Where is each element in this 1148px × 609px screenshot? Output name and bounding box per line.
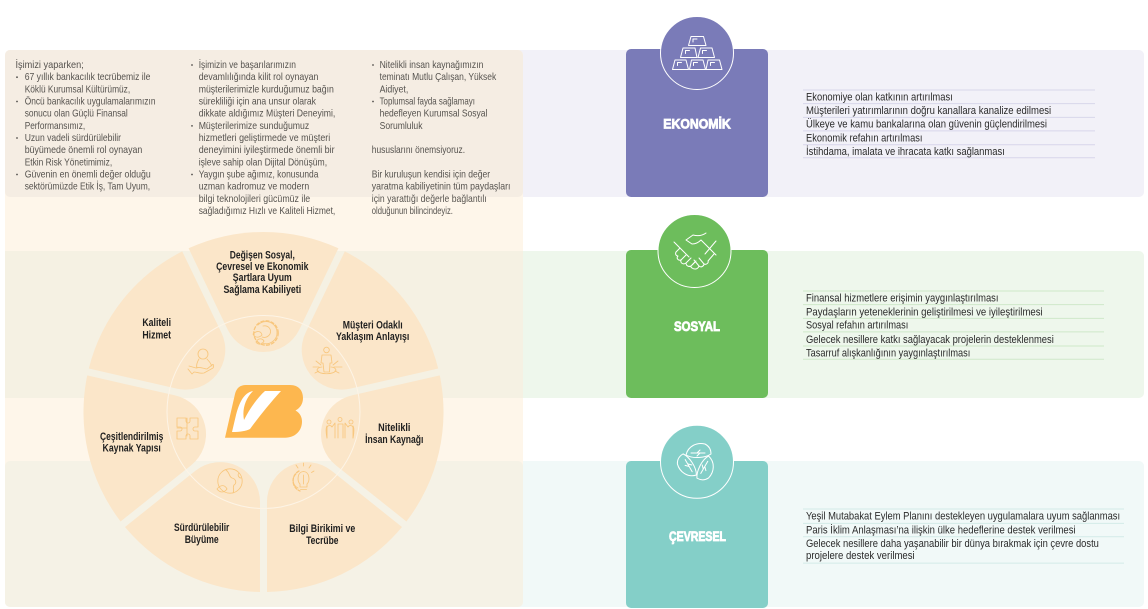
text column 3: yaratma kabiliyetinin tüm paydaşları bbox=[372, 182, 510, 193]
label: Değişen Sosyal: Şartlara Uyum bbox=[233, 272, 292, 284]
label: Nitelikli bbox=[365, 422, 423, 446]
icon: person with arrows bbox=[313, 347, 342, 374]
label: Sürdürülebilir bbox=[174, 522, 230, 546]
badge: sosyal bbox=[658, 214, 731, 288]
label: Sürdürülebilir: Büyüme bbox=[185, 534, 219, 546]
label: Müşteri Odaklı: Yaklaşım Anlayışı bbox=[336, 331, 409, 343]
text column 2: hizmetleri geliştirmede ve müşteri bbox=[199, 133, 330, 144]
panel: sosyal bbox=[626, 214, 1104, 398]
text column 1: İşimizi yaparken; bbox=[16, 58, 84, 71]
text column 2: sağladığımız Hızlı ve Kaliteli Hizmet, bbox=[199, 206, 335, 217]
label: Nitelikli: Nitelikli bbox=[378, 422, 410, 434]
heading: sosyal: SOSYAL bbox=[674, 319, 720, 334]
text column 3: Aidiyet, bbox=[380, 84, 408, 95]
text column 3: Sorumluluk bbox=[380, 121, 423, 132]
icon: gold bars bbox=[672, 36, 722, 70]
label: Çeşitlendirilmiş bbox=[100, 431, 163, 454]
label: Bilgi Birikimi: Tecrübe bbox=[306, 535, 338, 547]
icon: puzzle bbox=[177, 418, 198, 439]
list: cevresel: Paris İklim Anlaşması’na ilişkin ülke hedeflerine destek verilmesi bbox=[806, 524, 1076, 537]
wheel segments bbox=[71, 232, 456, 607]
text column 2: Yaygın şube ağımız, konusunda bbox=[199, 170, 319, 180]
list: sosyal: Paydaşların yeteneklerinin geliştirilmesi ve iyileştirilmesi bbox=[806, 306, 1043, 318]
list: ekonomik: İstihdama, imalata ve ihracata katkı sağlanması bbox=[806, 145, 1005, 158]
text column 2: devamlılığında kilit rol oynayan bbox=[199, 72, 319, 83]
label: Çeşitlendirilmiş: Kaynak Yapısı bbox=[103, 442, 161, 454]
text column 1: Güvenin en önemli değer olduğu bbox=[25, 170, 151, 180]
list: ekonomik: Ülkeye ve kamu bankalarına olan güvenin güçlendirilmesi bbox=[806, 118, 1047, 130]
text column 3: Nitelikli insan kaynağımızın bbox=[380, 60, 484, 71]
panel: cevresel bbox=[626, 425, 1124, 608]
icon: handshake bbox=[674, 233, 716, 269]
list: sosyal: Finansal hizmetlere erişimin yaygınlaştırılması bbox=[806, 292, 998, 304]
text column 3: hedefleyen Kurumsal Sosyal bbox=[380, 109, 487, 120]
icon: hand holding person bbox=[188, 349, 214, 374]
text column 1: sektörümüzde Etik İş, Tam Uyum, bbox=[25, 180, 150, 193]
list: sosyal: Sosyal refahın artırılması bbox=[806, 320, 908, 332]
list: ekonomik bbox=[803, 90, 1095, 158]
list: ekonomik: Ekonomiye olan katkının artırılması bbox=[806, 92, 953, 104]
card: sosyal bbox=[626, 250, 768, 398]
text column 2: dikkate aldığımız Müşteri Deneyimi, bbox=[199, 109, 335, 120]
panel: intro text bbox=[16, 58, 510, 217]
text column 1: Köklü Kurumsal Kültürümüz, bbox=[25, 84, 130, 95]
label: Müşteri Odaklı bbox=[336, 320, 409, 343]
icon: gear with leaves bbox=[253, 321, 278, 345]
badge: ekonomik bbox=[660, 16, 734, 90]
list: ekonomik: Müşterileri yatırımlarının doğru kanallara kanalize edilmesi bbox=[806, 105, 1051, 117]
text column 1: Uzun vadeli sürdürülebilir bbox=[25, 133, 121, 144]
text column 2: müşterilerimizle kurduğumuz bağın bbox=[199, 84, 334, 95]
icon: recycling leaves bbox=[674, 443, 719, 483]
text column 3: Toplumsal fayda sağlamayı bbox=[380, 96, 475, 108]
text column 2: bilgi teknolojileri gücümüz ile bbox=[199, 194, 310, 205]
text column 3: için yarattığı değerle bağlantılı bbox=[372, 194, 487, 205]
card: cevresel bbox=[626, 461, 768, 608]
text column 2: uzman kadromuz ve modern bbox=[199, 182, 309, 193]
label: Bilgi Birikimi: Bilgi Birikimi ve bbox=[289, 523, 355, 535]
badge: cevresel bbox=[660, 425, 734, 498]
text column 2: deneyimini iyileştirmede önemli bir bbox=[199, 145, 335, 156]
icon: team of people bbox=[326, 418, 354, 438]
text column 1: sonucu olan Güçlü Finansal bbox=[25, 109, 128, 120]
text column 1: Performansımız, bbox=[25, 121, 85, 132]
icon: light bulb with gear bbox=[293, 463, 314, 491]
label: Değişen Sosyal: Değişen Sosyal, bbox=[230, 250, 295, 262]
logo bbox=[225, 385, 303, 438]
text column 3 bbox=[372, 60, 510, 217]
text column 1: Etkin Risk Yönetimimiz, bbox=[25, 157, 112, 168]
text column 2: işleve sahip olan Dijital Dönüşüm, bbox=[199, 157, 327, 168]
text column 1: 67 yıllık bankacılık tecrübemiz ile bbox=[25, 72, 151, 83]
label: Bilgi Birikimi bbox=[289, 523, 355, 547]
icon: globe with leaf bbox=[217, 469, 242, 493]
value wheel bbox=[71, 232, 456, 607]
list: sosyal: Tasarruf alışkanlığının yaygınlaştırılması bbox=[806, 347, 970, 359]
text column 1: Öncü bankacılık uygulamalarımızın bbox=[25, 96, 156, 108]
label: Kaliteli Hizmet: Kaliteli bbox=[142, 317, 171, 329]
list: sosyal: Gelecek nesillere katkı sağlayacak projelerin desteklenmesi bbox=[806, 334, 1054, 346]
label: Kaliteli Hizmet: Hizmet bbox=[142, 330, 171, 342]
text column 3: teminatı Mutlu Çalışan, Yüksek bbox=[380, 72, 497, 83]
label: Müşteri Odaklı: Müşteri Odaklı bbox=[343, 320, 403, 332]
label: Sürdürülebilir: Sürdürülebilir bbox=[174, 522, 230, 534]
list: cevresel bbox=[803, 509, 1124, 563]
text column 2 bbox=[191, 58, 335, 217]
text column 1 bbox=[16, 58, 156, 193]
inner ring bbox=[167, 316, 360, 508]
text column 3: Bir kuruluşun kendisi için değer bbox=[372, 170, 491, 180]
label: Çeşitlendirilmiş: Çeşitlendirilmiş bbox=[100, 431, 163, 443]
panel: ekonomik bbox=[626, 16, 1095, 197]
list: ekonomik: Ekonomik refahın artırılması bbox=[806, 132, 922, 144]
label: Kaliteli Hizmet bbox=[142, 317, 171, 342]
list: cevresel: projelere destek verilmesi bbox=[806, 550, 915, 562]
heading: cevresel: ÇEVRESEL bbox=[669, 529, 726, 544]
text column 2: Müşterilerimize sunduğumuz bbox=[199, 121, 309, 132]
text column 3: olduğunun bilincindeyiz. bbox=[372, 206, 453, 217]
text column 2: İşimizin ve başarılarımızın bbox=[199, 58, 296, 71]
heading: ekonomik: EKONOMİK bbox=[663, 116, 731, 131]
label: Değişen Sosyal: Çevresel ve Ekonomik bbox=[216, 261, 309, 273]
label: Değişen Sosyal: Sağlama Kabiliyeti bbox=[223, 284, 301, 296]
label: Değişen Sosyal bbox=[216, 250, 309, 296]
card: ekonomik bbox=[626, 49, 768, 197]
text column 1: büyümede önemli rol oynayan bbox=[25, 145, 142, 156]
label: Nitelikli: İnsan Kaynağı bbox=[365, 433, 423, 446]
text column 2: sürekliliği için ana unsur olarak bbox=[199, 96, 317, 108]
text column 3: hususlarını önemsiyoruz. bbox=[372, 145, 465, 156]
list: sosyal bbox=[803, 291, 1104, 359]
